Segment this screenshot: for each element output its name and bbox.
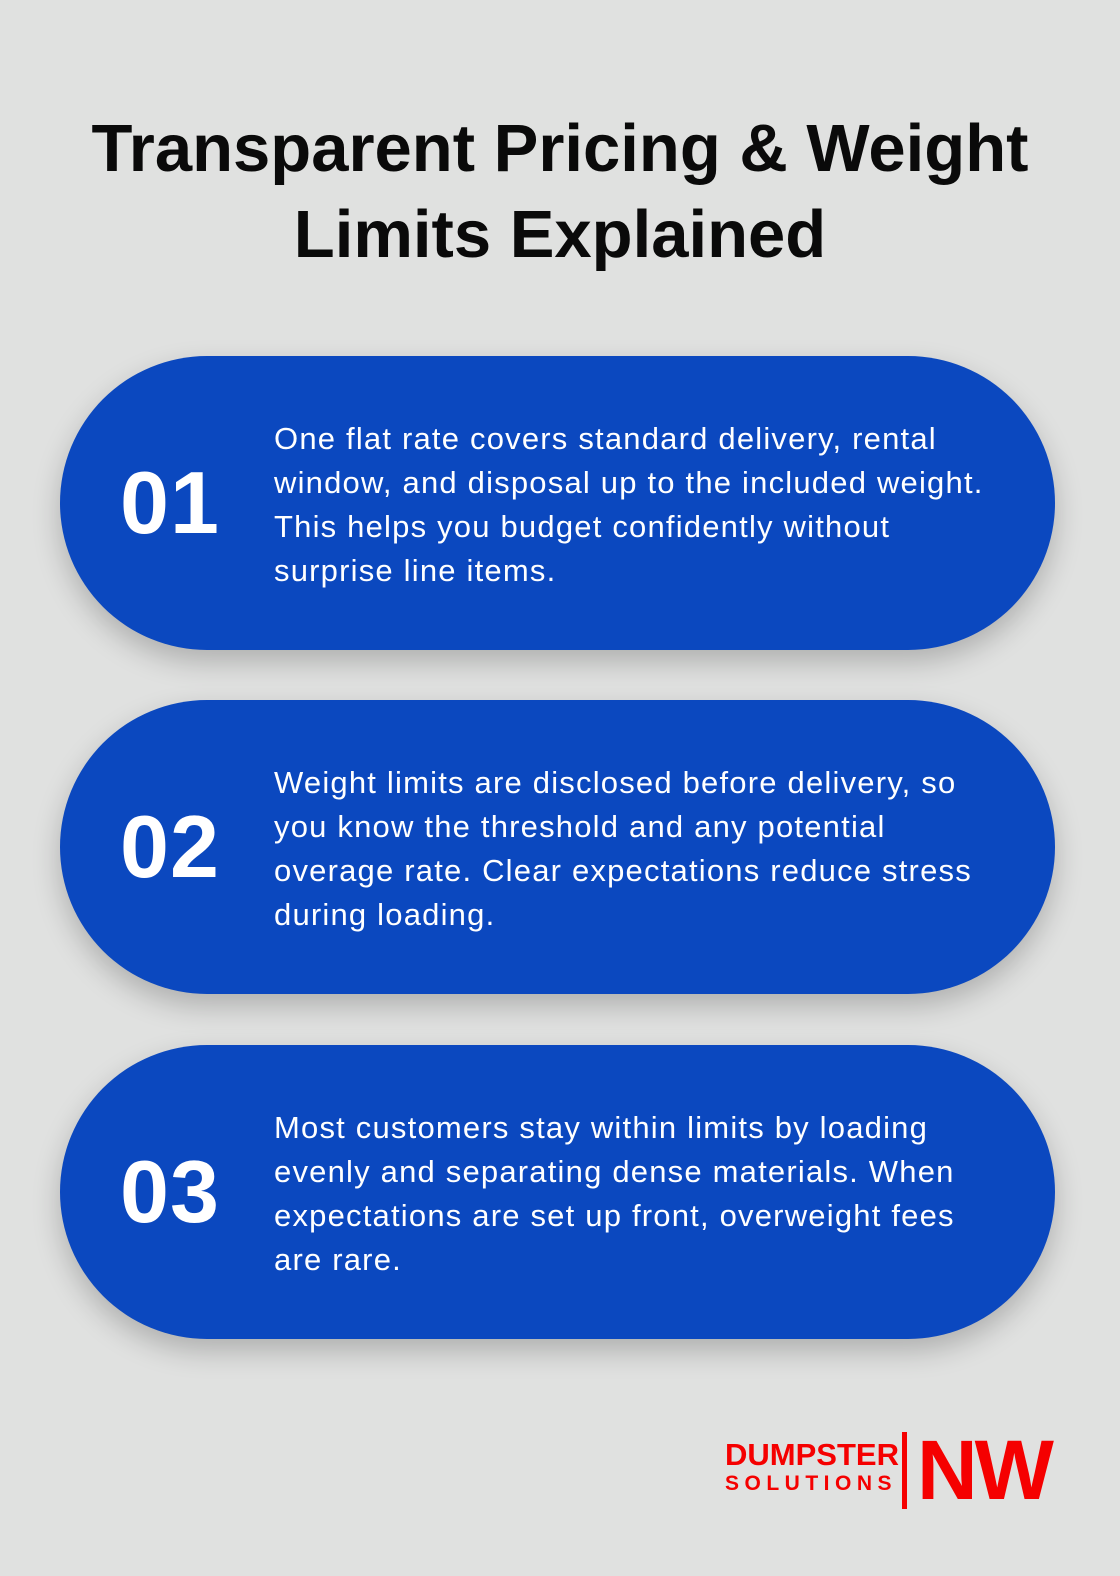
title xyxy=(92,111,1028,272)
panel: card 01 xyxy=(60,356,1055,650)
title: Transparent Pricing & Weight xyxy=(92,111,1028,186)
text 03: Most customers stay within limits by loading xyxy=(274,1110,928,1145)
logo xyxy=(725,1423,1054,1517)
logo: DUMPSTER xyxy=(725,1437,899,1472)
number 01: 01 xyxy=(120,453,220,552)
logo: SOLUTIONS xyxy=(725,1472,897,1495)
text 03 xyxy=(274,1110,955,1277)
text 02: overage rate. Clear expectations reduce stress xyxy=(274,853,972,888)
number 03: 03 xyxy=(120,1142,220,1241)
text 01: window, and disposal up to the included weight. xyxy=(274,465,984,500)
text 03: evenly and separating dense materials. When xyxy=(274,1154,955,1189)
text 03: expectations are set up front, overweight fees xyxy=(274,1198,955,1233)
text 02: during loading. xyxy=(274,897,495,932)
text 02: you know the threshold and any potential xyxy=(274,809,886,844)
logo: NW xyxy=(917,1423,1051,1517)
panel: card 03 xyxy=(60,1045,1055,1339)
number 02: 02 xyxy=(120,797,220,896)
text 01: One flat rate covers standard delivery, rental xyxy=(274,421,937,456)
text 02 xyxy=(274,765,972,932)
title: Limits Explained xyxy=(294,197,826,272)
panel: card 02 xyxy=(60,700,1055,994)
text 01: surprise line items. xyxy=(274,553,556,588)
text 03: are rare. xyxy=(274,1242,402,1277)
text 02: Weight limits are disclosed before delivery, so xyxy=(274,765,956,800)
text 01: This helps you budget confidently without xyxy=(274,509,890,544)
text 01 xyxy=(274,421,984,588)
